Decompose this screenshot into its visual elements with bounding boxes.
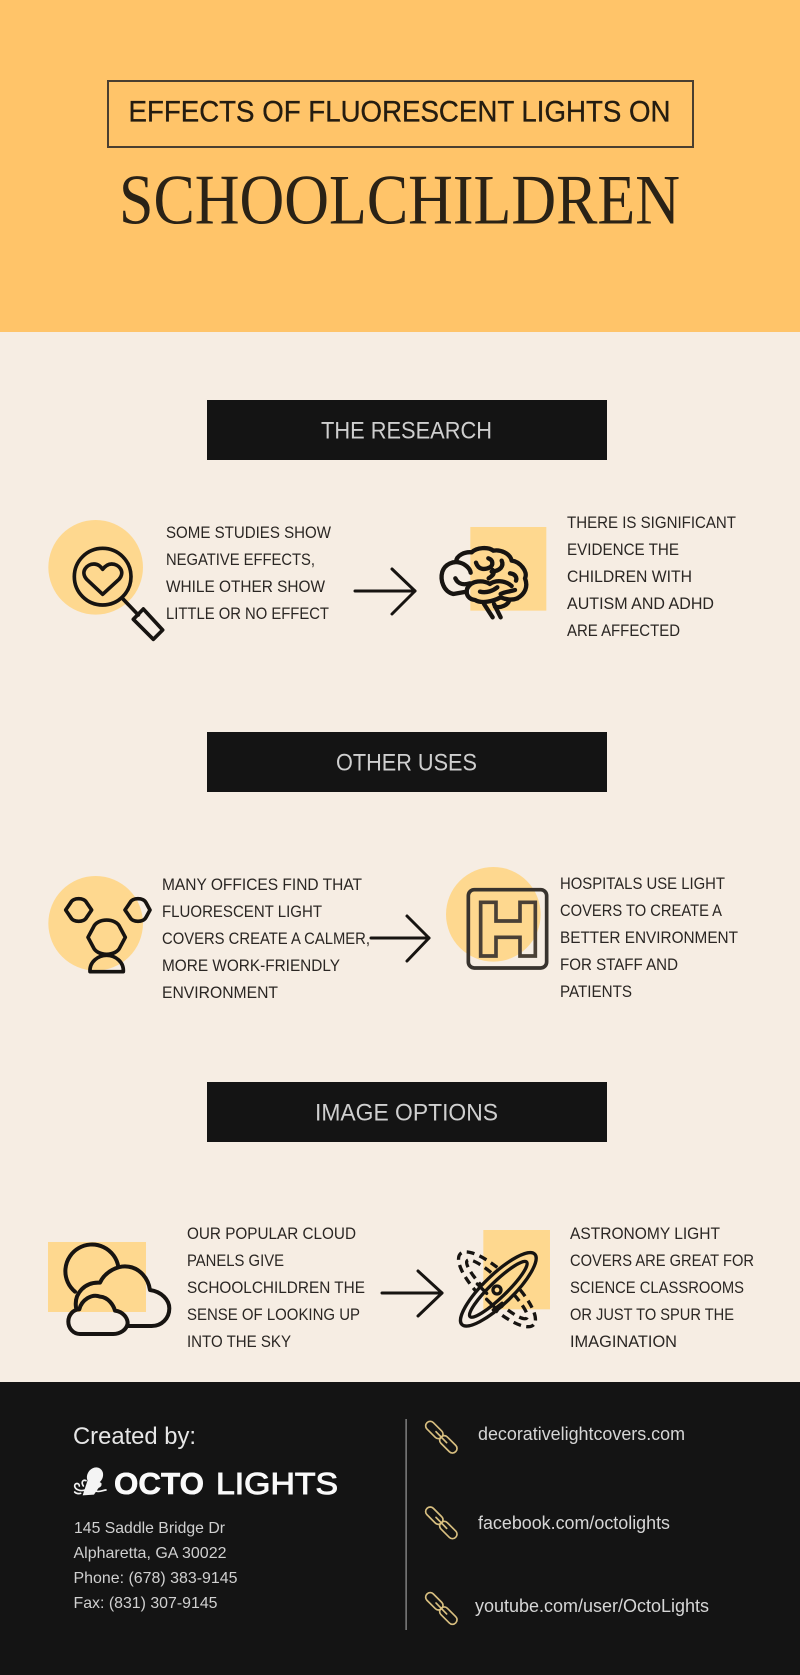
arrow: research <box>355 569 415 614</box>
text: cloud panels: SENSE OF LOOKING UP <box>187 1306 360 1324</box>
text: offices: ENVIRONMENT <box>162 984 278 1002</box>
text: research right <box>567 514 736 640</box>
text: hospitals: COVERS TO CREATE A <box>560 902 722 920</box>
header band <box>0 0 800 332</box>
text: cloud panels: SCHOOLCHILDREN THE <box>187 1279 365 1297</box>
heading: the research <box>207 400 607 460</box>
title line two: SCHOOLCHILDREN <box>119 162 680 240</box>
heading: other uses <box>207 732 607 792</box>
text: research right: EVIDENCE THE <box>567 541 679 559</box>
icon: people <box>48 876 150 972</box>
text: research left: SOME STUDIES SHOW <box>166 524 331 542</box>
icon: hospital sign <box>446 867 547 968</box>
text: research left: LITTLE OR NO EFFECT <box>166 605 329 623</box>
facebook link: facebook.com/octolights <box>478 1513 670 1533</box>
text: astronomy: SCIENCE CLASSROOMS <box>570 1279 744 1297</box>
text: offices: FLUORESCENT LIGHT <box>162 903 322 921</box>
icon: magnifier with heart <box>48 520 163 639</box>
text: cloud panels: INTO THE SKY <box>187 1333 291 1351</box>
created by label: Created by: <box>73 1423 196 1450</box>
text: offices: MORE WORK-FRIENDLY <box>162 957 340 975</box>
heading: image options: IMAGE OPTIONS <box>315 1100 498 1126</box>
icon: link youtube <box>424 1591 459 1626</box>
arrow: other uses <box>371 916 429 961</box>
text: hospitals: FOR STAFF AND <box>560 956 678 974</box>
logo wordmark <box>114 1466 338 1501</box>
text: research left: WHILE OTHER SHOW <box>166 578 325 596</box>
text: research right: AUTISM AND ADHD <box>567 595 714 613</box>
text: research right: THERE IS SIGNIFICANT <box>567 514 736 532</box>
text: cloud panels: PANELS GIVE <box>187 1252 284 1270</box>
icon: astronomy orbit <box>456 1230 550 1328</box>
address: Alpharetta, GA 30022 <box>74 1545 227 1562</box>
logo wordmark: LIGHTS <box>216 1466 338 1501</box>
text: astronomy: ASTRONOMY LIGHT <box>570 1225 720 1243</box>
address <box>74 1520 238 1612</box>
text: hospitals: BETTER ENVIRONMENT <box>560 929 738 947</box>
text: offices <box>162 876 370 1002</box>
icon: octopus logo <box>75 1464 106 1495</box>
text: astronomy: COVERS ARE GREAT FOR <box>570 1252 754 1270</box>
text: research left <box>166 524 331 623</box>
text: astronomy <box>570 1225 754 1351</box>
heading: other uses: OTHER USES <box>336 750 477 776</box>
website link: decorativelightcovers.com <box>478 1424 685 1444</box>
logo wordmark: OCTO <box>114 1466 204 1501</box>
icon: link website <box>424 1420 459 1455</box>
text: cloud panels <box>187 1225 365 1351</box>
divider <box>406 1419 407 1630</box>
text: research right: ARE AFFECTED <box>567 622 680 640</box>
title line one: EFFECTS OF FLUORESCENT LIGHTS ON <box>128 96 670 128</box>
text: astronomy: OR JUST TO SPUR THE <box>570 1306 734 1324</box>
icon: brain <box>442 527 546 617</box>
address: 145 Saddle Bridge Dr <box>74 1520 226 1537</box>
arrow: image options <box>382 1271 442 1316</box>
address: Fax: (831) 307-9145 <box>74 1595 218 1612</box>
icon: sun and clouds <box>48 1242 169 1334</box>
text: astronomy: IMAGINATION <box>570 1333 677 1351</box>
text: research right: CHILDREN WITH <box>567 568 692 586</box>
text: offices: MANY OFFICES FIND THAT <box>162 876 362 894</box>
text: hospitals: PATIENTS <box>560 983 632 1001</box>
footer panel <box>0 1382 800 1675</box>
heading: the research: THE RESEARCH <box>321 418 492 444</box>
text: cloud panels: OUR POPULAR CLOUD <box>187 1225 356 1243</box>
title frame <box>108 81 693 147</box>
icon: link facebook <box>424 1505 459 1541</box>
heading: image options <box>207 1082 607 1142</box>
youtube link: youtube.com/user/OctoLights <box>475 1596 709 1616</box>
text: offices: COVERS CREATE A CALMER, <box>162 930 370 948</box>
text: hospitals: HOSPITALS USE LIGHT <box>560 875 725 893</box>
address: Phone: (678) 383-9145 <box>74 1570 238 1587</box>
text: hospitals <box>560 875 738 1001</box>
text: research left: NEGATIVE EFFECTS, <box>166 551 315 569</box>
